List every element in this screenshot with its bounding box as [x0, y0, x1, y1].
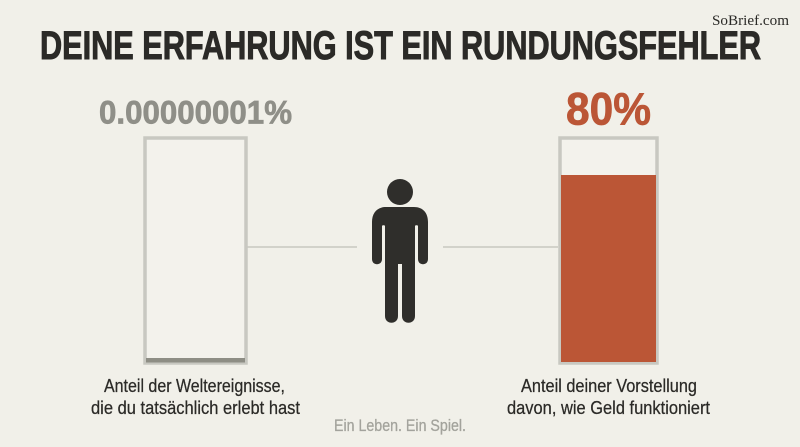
- right bar fill: [561, 175, 656, 362]
- footer note: Ein Leben. Ein Spiel.: [334, 416, 466, 435]
- right caption: [507, 375, 710, 418]
- right percentage: 80%: [566, 84, 651, 134]
- left caption: Anteil der Weltereignisse,: [104, 375, 285, 396]
- right caption: davon, wie Geld funktioniert: [507, 397, 710, 418]
- left bar tiny fill: [146, 358, 245, 362]
- left caption: [91, 375, 300, 418]
- icon: person: [372, 179, 428, 323]
- right bar: [560, 138, 657, 363]
- left bar: [145, 138, 246, 363]
- right caption: Anteil deiner Vorstellung: [521, 375, 697, 396]
- brand label: SoBrief.com: [712, 13, 789, 29]
- left percentage: 0.00000001%: [99, 94, 292, 130]
- left caption: die du tatsächlich erlebt hast: [91, 397, 300, 418]
